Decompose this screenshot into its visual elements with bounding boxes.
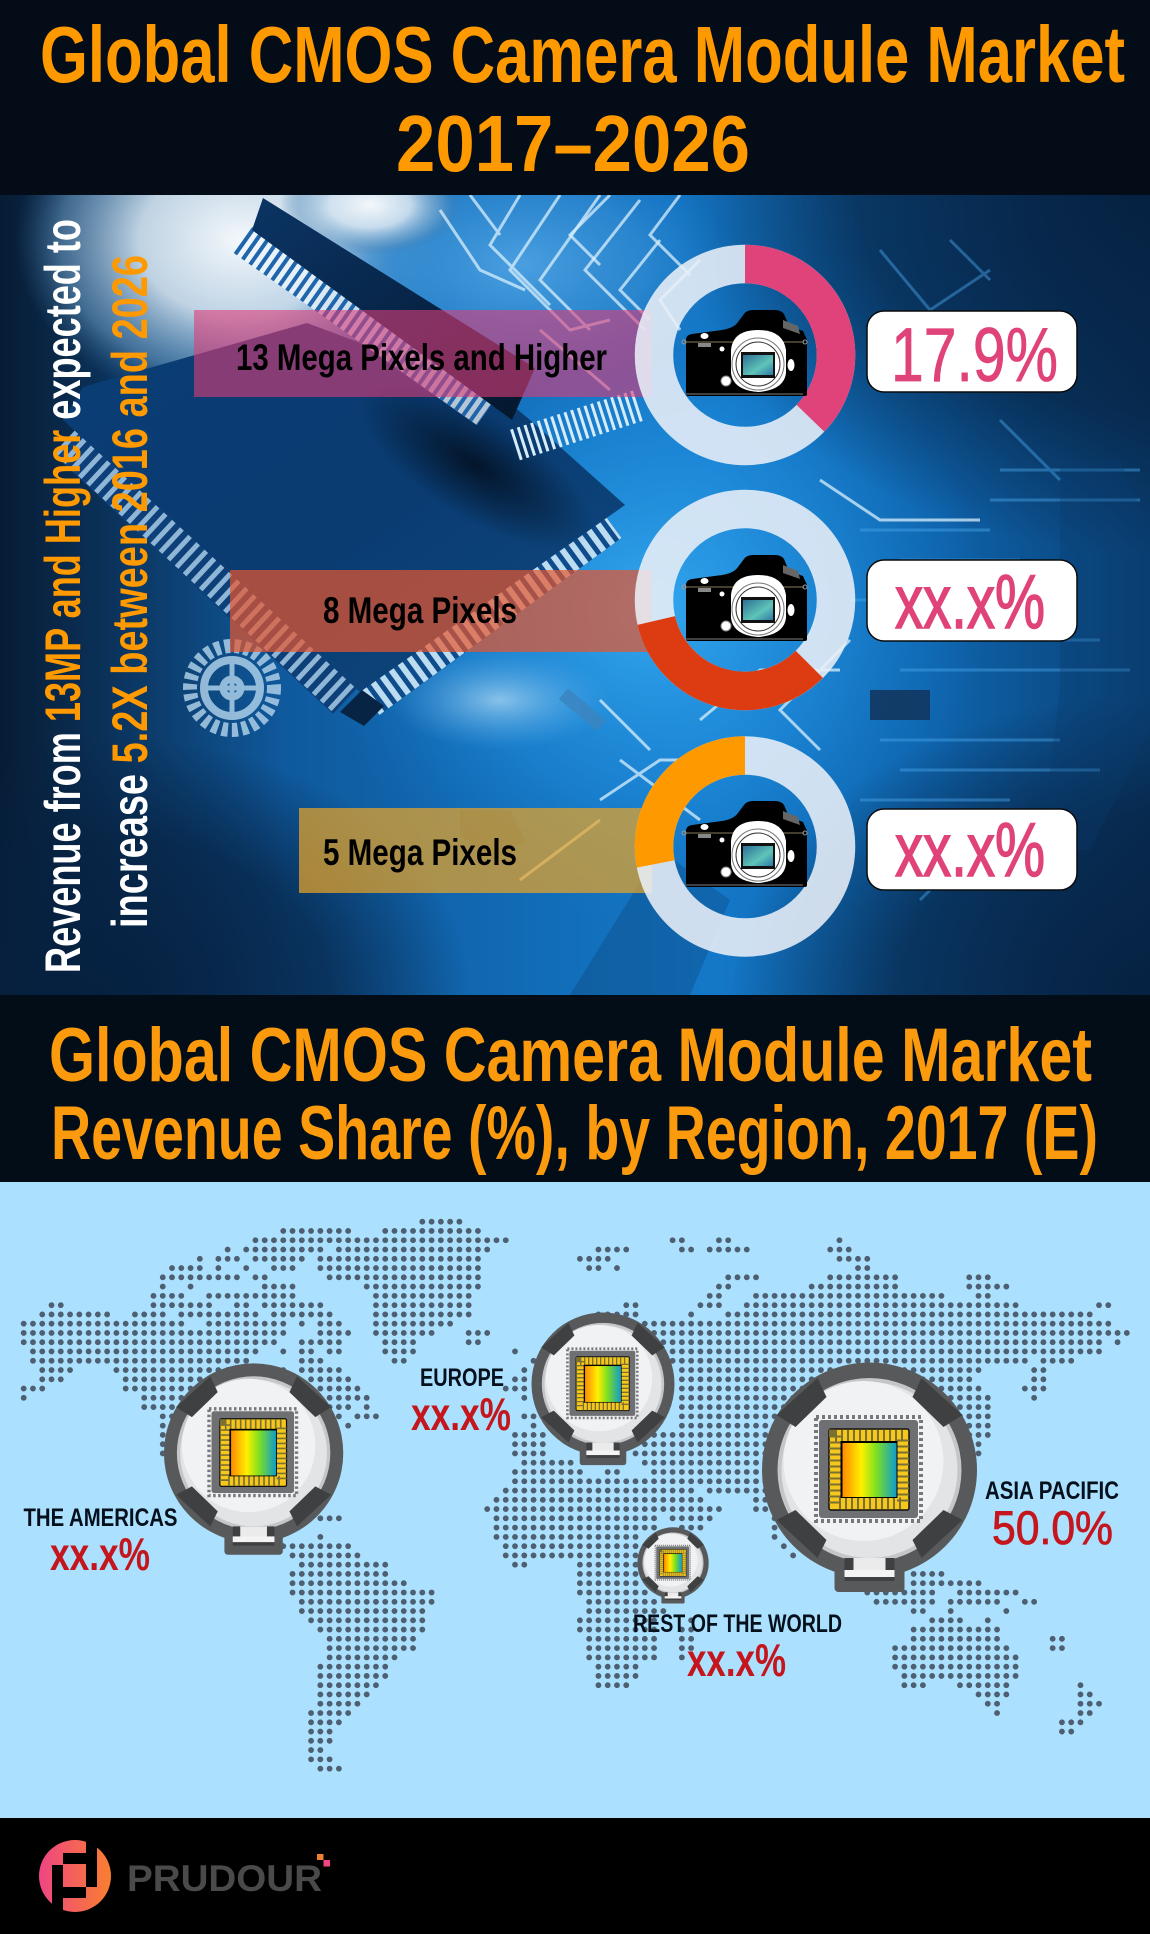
- label bar: 8 Mega Pixels: 8 Mega Pixels: [323, 590, 517, 631]
- section heading: [49, 1013, 1098, 1176]
- label bar: 13 Mega Pixels and Higher: [194, 310, 652, 397]
- marker: The Americas: [164, 1363, 343, 1555]
- vertical callout text: increase 5.2X between 2016 and 2026: [102, 255, 158, 928]
- label bar: 8 Mega Pixels: [230, 570, 652, 652]
- chip: lower-left pins: [66, 440, 346, 700]
- donut: 5 MP with camera icon: [654, 756, 836, 938]
- region label: Asia Pacific: 50.0%: [992, 1501, 1113, 1554]
- region label: Asia Pacific: [985, 1477, 1119, 1554]
- label bar: 5 Mega Pixels: 5 Mega Pixels: [323, 832, 517, 873]
- region label: Rest of the World: REST OF THE WORLD: [633, 1610, 842, 1638]
- title: 2017–2026: [396, 99, 750, 188]
- chip: body: [63, 323, 625, 692]
- gear: [190, 646, 274, 730]
- label bar: 13 Mega Pixels and Higher: 13 Mega Pixels and Higher: [236, 337, 607, 378]
- marker: Europe: [532, 1313, 674, 1465]
- region label: Europe: [411, 1364, 511, 1440]
- region label: Europe: xx.x%: [411, 1388, 511, 1440]
- region label: The Americas: [24, 1504, 178, 1580]
- section heading background: [0, 995, 1150, 1182]
- chip: lower-right pins: [370, 525, 612, 702]
- header background: [0, 0, 1150, 195]
- marker: Asia Pacific: [762, 1362, 977, 1592]
- region label: Rest of the World: xx.x%: [687, 1634, 786, 1686]
- chip: dark top ridge: [252, 198, 535, 420]
- region label: The Americas: xx.x%: [50, 1528, 150, 1580]
- value box: 17.9%: 17.9%: [891, 313, 1058, 398]
- logo: Prudour: [39, 1840, 330, 1912]
- region label: Rest of the World: [633, 1610, 842, 1686]
- value box: 5 MP: xx.x%: [895, 808, 1045, 893]
- marker: Rest of the World: [637, 1527, 709, 1604]
- footer background: [0, 1818, 1150, 1934]
- vertical callout text: [35, 219, 158, 973]
- title: [40, 10, 1125, 188]
- label bar: 5 Mega Pixels: [299, 808, 652, 893]
- value box: 8 MP: xx.x%: [895, 560, 1045, 645]
- dotted world map: [24, 1222, 1127, 1769]
- chip: top pins: [243, 240, 486, 412]
- donut: 8 MP with camera icon: [654, 509, 836, 691]
- logo: Prudour: PRUDOUR: [127, 1858, 322, 1899]
- vertical callout text: Revenue from 13MP and Higher expected to: [35, 219, 91, 973]
- donut: 13 MP with camera icon: [654, 264, 836, 446]
- region label: Asia Pacific: ASIA PACIFIC: [985, 1477, 1119, 1505]
- region label: The Americas: THE AMERICAS: [24, 1504, 178, 1532]
- map panel background: [0, 1182, 1150, 1818]
- panel: photo background with processor chip: [0, 195, 1150, 995]
- region label: Europe: EUROPE: [420, 1364, 504, 1392]
